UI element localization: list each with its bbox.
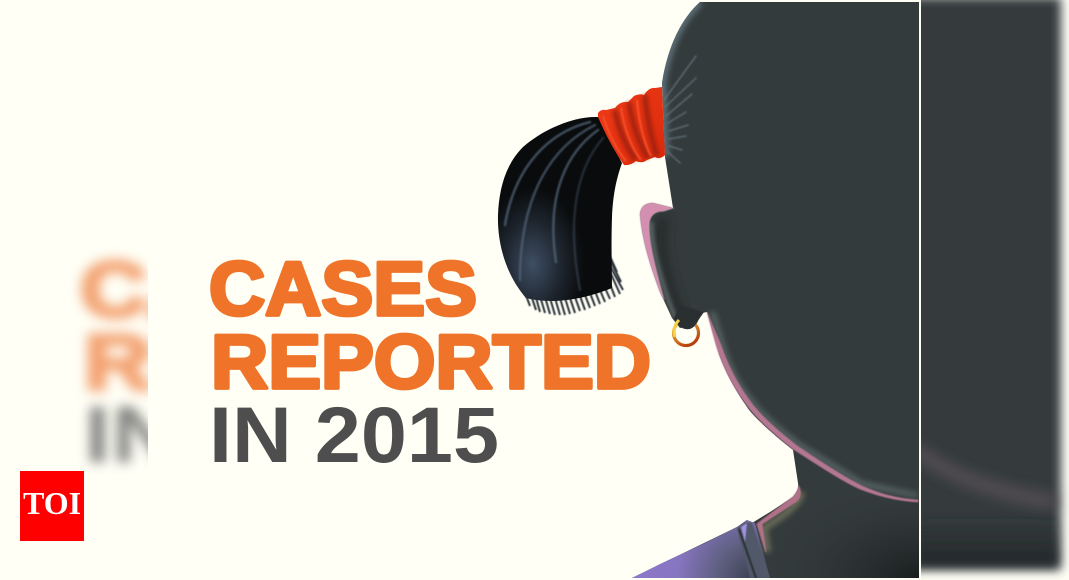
- blurred left copy of title: REPORTED: [84, 318, 604, 406]
- bottom fringe teeth: [524, 252, 623, 315]
- hair body: [498, 117, 622, 301]
- TOI logo: TOI: [23, 485, 81, 521]
- jaw pink line: [707, 312, 918, 502]
- figure: girl silhouette from behind: [498, 2, 920, 578]
- neck shading: [842, 530, 919, 578]
- ponytail: [498, 117, 623, 315]
- title line: CASES: CASES: [209, 247, 477, 332]
- blurred left copy of title: CASES: [80, 245, 400, 333]
- ear soft shading: [661, 218, 680, 320]
- blurred right panel: [900, 0, 1061, 570]
- red hair band: [598, 87, 665, 165]
- jaw teal glow: [712, 312, 918, 496]
- collar and shirt: [632, 518, 772, 578]
- ear pink rim: [640, 203, 673, 300]
- TOI logo: [20, 471, 84, 541]
- neck pink line: [757, 486, 800, 552]
- blurred left copy of title: IN 2015: [84, 390, 424, 479]
- title line: REPORTED: REPORTED: [211, 320, 651, 405]
- neck warm glow: [764, 492, 802, 552]
- blurred left copy of title: [73, 250, 148, 470]
- lighter rim on scalp: [662, 2, 700, 157]
- hair strands near band: [664, 56, 696, 163]
- head and neck: [632, 2, 920, 578]
- earring: [674, 305, 704, 346]
- title: [209, 247, 651, 479]
- title line: IN 2015: IN 2015: [209, 390, 499, 479]
- white divider: [920, 0, 921, 580]
